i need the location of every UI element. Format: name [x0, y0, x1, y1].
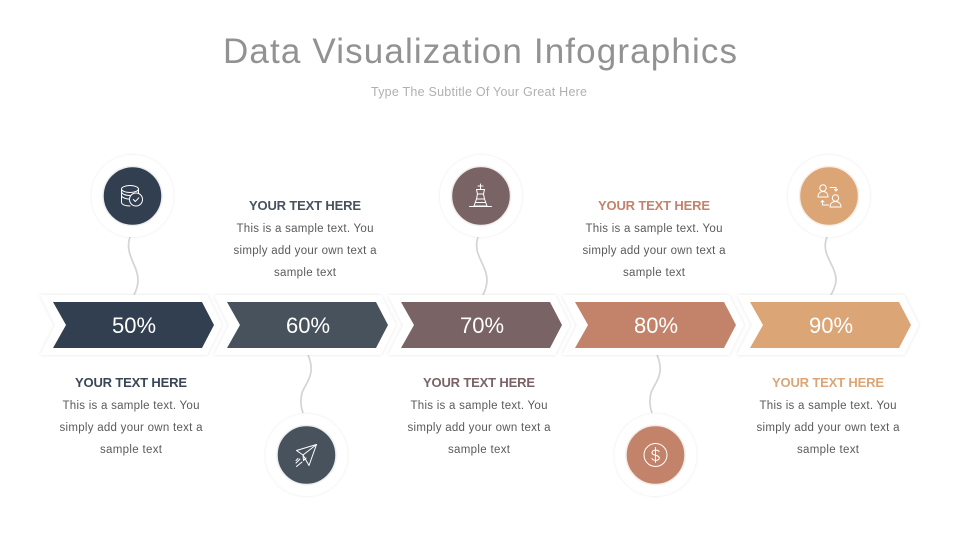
icon badge: database check	[92, 155, 174, 237]
text block: step 5: This is a sample text. You	[760, 400, 896, 412]
text block: step 1: sample text	[100, 444, 163, 456]
text block: step 5: sample text	[797, 444, 860, 456]
chevron: 80%	[562, 295, 744, 355]
chevron: 70%: 70%	[460, 313, 504, 338]
text block: step 1: simply add your own text a	[60, 422, 203, 434]
chevron: 50%: 50%	[112, 313, 156, 338]
connector: step 3	[477, 237, 487, 295]
connector: step 2	[301, 355, 311, 413]
text block: step 4: simply add your own text a	[582, 245, 726, 257]
text block: step 3: YOUR TEXT HERE	[423, 375, 535, 390]
text block: step 5: simply add your own text a	[756, 422, 900, 434]
icon badge: chess piece	[440, 155, 522, 237]
connector: step 4	[650, 355, 660, 413]
chevron: 90%: 90%	[809, 313, 853, 338]
text block: step 4: YOUR TEXT HERE	[598, 198, 710, 213]
icon badge: paper plane	[266, 414, 348, 496]
chevron: 60%: 60%	[286, 313, 330, 338]
text block: step 4: sample text	[623, 267, 686, 279]
connector: step 5	[825, 237, 836, 295]
text block: step 2: simply add your own text a	[234, 245, 377, 257]
icon badge: dollar coin	[614, 414, 696, 496]
text block: step 1: This is a sample text. You	[62, 400, 200, 412]
chevron: 50%	[40, 295, 222, 355]
text block: step 2: YOUR TEXT HERE	[249, 198, 361, 213]
chevron: 60%	[214, 295, 396, 355]
chevron: 90%	[737, 295, 919, 355]
title: Data Visualization Infographics	[223, 32, 737, 71]
connector: step 1	[129, 237, 138, 295]
text block: step 2: sample text	[274, 267, 337, 279]
icon badge: people exchange	[788, 155, 870, 237]
text block: step 3: This is a sample text. You	[410, 400, 548, 412]
text block: step 3: sample text	[448, 444, 511, 456]
subtitle: Type The Subtitle Of Your Great Here	[371, 85, 587, 99]
text block: step 2	[234, 198, 377, 279]
text block: step 1: YOUR TEXT HERE	[75, 375, 187, 390]
text block: step 5	[756, 375, 900, 456]
text block: step 4	[582, 198, 726, 279]
text block: step 4: This is a sample text. You	[586, 223, 722, 235]
text block: step 1	[60, 375, 203, 456]
text block: step 3	[408, 375, 551, 456]
text block: step 5: YOUR TEXT HERE	[772, 375, 884, 390]
text block: step 2: This is a sample text. You	[236, 223, 374, 235]
chevron: 80%: 80%	[634, 313, 678, 338]
text block: step 3: simply add your own text a	[408, 422, 551, 434]
chevron: 70%	[388, 295, 570, 355]
